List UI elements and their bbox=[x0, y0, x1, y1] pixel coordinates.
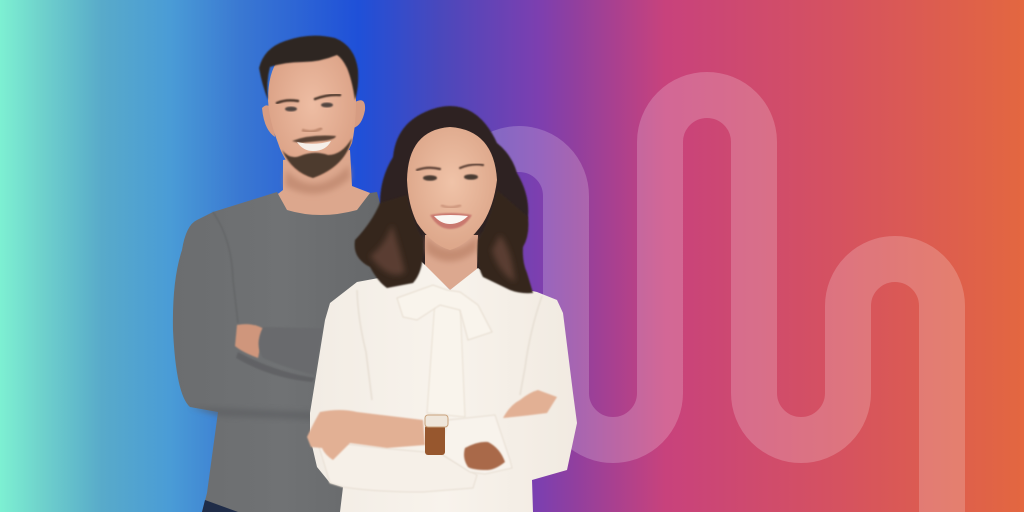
woman bbox=[307, 106, 577, 512]
woman: lower sleeve bbox=[317, 440, 477, 492]
woman: hair highlights bbox=[370, 225, 515, 282]
woman: left hand bbox=[307, 410, 425, 460]
man: neck bbox=[270, 150, 378, 222]
woman: neck bbox=[425, 235, 478, 290]
man: nose bbox=[302, 128, 322, 132]
man: brows bbox=[277, 95, 340, 103]
man: lower edge shadow bbox=[190, 407, 318, 420]
woman: watch strap bbox=[425, 425, 445, 455]
man: hair bbox=[259, 36, 358, 100]
woman: blouse bbox=[310, 260, 577, 512]
woman: eyes bbox=[423, 175, 437, 181]
man bbox=[173, 36, 392, 512]
woman: neck shadow bbox=[426, 236, 477, 262]
woman: bow bbox=[397, 285, 492, 340]
man: moustache bbox=[292, 136, 336, 143]
man: sleeve cuff bbox=[258, 327, 323, 375]
woman: hair back bbox=[380, 106, 528, 280]
man: smile bbox=[297, 141, 331, 151]
woman: cuff bbox=[440, 415, 512, 474]
man: sleeve seam bbox=[213, 212, 238, 323]
woman: lips bbox=[430, 213, 472, 229]
wave ribbon bbox=[472, 95, 942, 512]
woman: left hair lock bbox=[355, 195, 423, 288]
woman: watch face bbox=[425, 415, 448, 427]
man: forearm shadow bbox=[236, 352, 315, 382]
woman: brows bbox=[417, 164, 483, 170]
man: eyes bbox=[285, 107, 297, 111]
woman: teeth bbox=[434, 215, 468, 224]
woman: wrist opening bbox=[464, 442, 505, 470]
woman: face bbox=[407, 127, 497, 250]
man: face bbox=[268, 45, 356, 178]
woman: right hand bbox=[503, 390, 557, 418]
man: jeans bbox=[202, 500, 238, 512]
man: ears bbox=[262, 100, 365, 137]
woman: right hair lock bbox=[478, 190, 533, 293]
woman: tie bbox=[427, 300, 465, 417]
woman: nose bbox=[441, 205, 461, 208]
man: sweater bbox=[173, 192, 392, 512]
man: neck shadow bbox=[285, 165, 350, 194]
man: hand bbox=[235, 324, 264, 358]
man: beard bbox=[282, 138, 352, 178]
woman: sleeve seams bbox=[357, 290, 542, 400]
